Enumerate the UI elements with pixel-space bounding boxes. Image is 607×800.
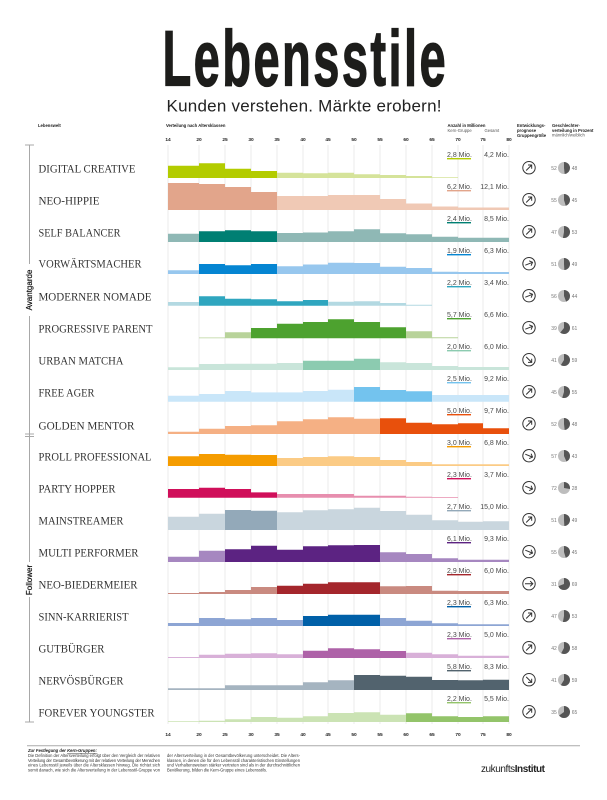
millions: 8,5 Mio.: [484, 216, 509, 223]
trend icon: [520, 351, 538, 368]
gender split: [551, 610, 577, 622]
age distribution: [168, 263, 509, 274]
footnote: eines Lebensstil jeweils über die Altersklassen hinweg. Die richtet sich: [28, 763, 161, 768]
gender split: [551, 546, 577, 558]
name: NERVÖSBÜRGER: [38, 675, 124, 687]
column headers: männlich/weiblich: [552, 132, 585, 138]
millions: [447, 408, 509, 415]
gender split: 55: [551, 198, 557, 204]
millions: [447, 216, 509, 223]
millions: 2,3 Mio.: [447, 600, 472, 607]
bottom age axis: 25: [222, 732, 228, 738]
bottom age axis: 70: [455, 732, 461, 738]
top age axis: 30: [248, 137, 254, 143]
column headers: prognose: [517, 128, 537, 133]
gender split: [551, 642, 577, 654]
row: Mainstreamer: [38, 504, 577, 530]
age distribution: [168, 712, 509, 722]
trend icon: [521, 256, 537, 272]
millions: 3,0 Mio.: [447, 440, 472, 447]
gender split: 28: [572, 486, 577, 492]
age distribution: [199, 319, 458, 338]
millions: 5,0 Mio.: [484, 632, 509, 639]
column headers: Lebenswelt: [38, 123, 61, 128]
column headers: [38, 123, 594, 138]
millions: 6,0 Mio.: [484, 344, 509, 351]
millions: [447, 664, 509, 671]
millions: 6,8 Mio.: [484, 440, 509, 447]
age distribution: [168, 296, 432, 306]
top age axis: 14: [165, 137, 171, 143]
millions: 8,3 Mio.: [484, 664, 509, 671]
millions: 6,3 Mio.: [484, 600, 509, 607]
gender split: 69: [572, 582, 577, 588]
millions: 4,2 Mio.: [484, 152, 509, 159]
trend icon: [521, 544, 537, 560]
gender split: 47: [551, 230, 557, 236]
millions: [447, 696, 509, 703]
footnote: Bevölkerung, bilden die Kern-Gruppe eines Lebensstils.: [167, 768, 267, 772]
gender split: [551, 226, 577, 238]
millions: 6,6 Mio.: [484, 312, 509, 319]
bottom age axis: 14: [165, 732, 171, 738]
row: Progressive Parent: [38, 312, 577, 338]
gender split: [551, 290, 577, 302]
millions: 6,2 Mio.: [447, 184, 472, 191]
age distribution: [168, 675, 509, 690]
bottom age axis: [165, 732, 512, 738]
gender split: 49: [572, 262, 577, 268]
gender split: [551, 194, 577, 206]
row: Vorwärtsmacher: [38, 248, 577, 274]
millions: [447, 504, 509, 511]
millions: 2,5 Mio.: [447, 376, 472, 383]
millions: [447, 152, 509, 159]
bottom age axis: 45: [325, 732, 331, 738]
logo: zukunftsInstitut: zukunftsInstitut: [481, 764, 546, 775]
row: Forever Youngster: [38, 696, 577, 722]
name: FOREVER YOUNGSTER: [38, 707, 155, 719]
top age axis: 35: [274, 137, 280, 143]
gender split: 51: [551, 262, 557, 268]
gender split: 45: [551, 390, 557, 396]
gender split: [551, 258, 577, 270]
name: GOLDEN MENTOR: [38, 420, 135, 432]
gender split: [551, 578, 577, 590]
age distribution: [168, 545, 509, 562]
millions: 15,0 Mio.: [480, 504, 509, 511]
row: Nervösbürger: [38, 664, 577, 690]
row: Multi Performer: [38, 536, 577, 562]
trend icon: [521, 480, 537, 496]
footnote: und Verhaltensweisen stärker vertreten sind als in der durchschnittlichen: [167, 763, 301, 768]
age distribution: [168, 387, 509, 402]
gender split: 35: [551, 710, 557, 716]
top age axis: 55: [377, 137, 383, 143]
gender split: [551, 706, 577, 718]
row: Self Balancer: [38, 216, 577, 242]
millions: 2,2 Mio.: [447, 280, 472, 287]
name: URBAN MATCHA: [38, 355, 124, 367]
row: Gutbürger: [38, 632, 577, 658]
gender split: 59: [572, 358, 577, 364]
footnote: Verteilung der Gesamtbevölkerung mit der relativen Verteilung der Menschen: [28, 758, 161, 763]
millions: 12,1 Mio.: [480, 184, 509, 191]
bottom age axis: 80: [506, 732, 512, 738]
row: Urban Matcha: [38, 344, 577, 370]
bottom age axis: 50: [351, 732, 357, 738]
gender split: 58: [572, 646, 577, 652]
name: MAINSTREAMER: [38, 515, 124, 527]
row: Moderner Nomade: [38, 280, 577, 306]
millions: 5,7 Mio.: [447, 312, 472, 319]
footnote: [27, 748, 301, 772]
label: Follower: Follower: [25, 565, 34, 595]
millions: [447, 632, 509, 639]
top age axis: [165, 137, 512, 143]
column headers: Gruppengröße: [517, 133, 547, 138]
trend icon: [520, 383, 538, 400]
gender split: [551, 418, 577, 430]
top age axis: 50: [351, 137, 357, 143]
row: Neo-Hippie: [38, 183, 577, 210]
trend icon: [523, 578, 535, 590]
age distribution: [168, 582, 509, 594]
gender split: [551, 514, 577, 526]
gender split: 45: [572, 198, 577, 204]
millions: 5,0 Mio.: [447, 408, 472, 415]
millions: 6,1 Mio.: [447, 536, 472, 543]
label: Avantgarde: Avantgarde: [25, 269, 34, 310]
gender split: 44: [572, 294, 577, 300]
column headers: Anzahl in Millionen: [448, 123, 486, 128]
millions: [447, 472, 509, 479]
trend icon: [520, 191, 538, 208]
gender split: 65: [572, 710, 577, 716]
age distribution: [168, 359, 509, 370]
name: GUTBÜRGER: [38, 643, 105, 655]
top age axis: 65: [429, 137, 435, 143]
gender split: [551, 322, 577, 334]
row: Free Ager: [38, 376, 577, 402]
trend icon: [520, 159, 538, 176]
millions: [447, 536, 509, 543]
gender split: 72: [551, 486, 557, 492]
trend icon: [521, 320, 537, 336]
column headers: Gesamt: [484, 128, 500, 133]
top age axis: 40: [300, 137, 306, 143]
age distribution: [168, 648, 509, 658]
footnote: Die Definition der Altersverteilung erfolgt über den Vergleich der relativen: [28, 753, 161, 758]
row: Digital Creative: [38, 152, 577, 178]
gender split: 49: [572, 518, 577, 524]
bottom age axis: 75: [480, 732, 486, 738]
gender split: 53: [572, 230, 577, 236]
millions: 2,2 Mio.: [447, 696, 472, 703]
trend icon: [521, 448, 537, 464]
gender split: 53: [572, 614, 577, 620]
trend icon: [520, 703, 538, 720]
bottom age axis: 35: [274, 732, 280, 738]
millions: [447, 600, 509, 607]
millions: 2,0 Mio.: [447, 344, 472, 351]
gender split: 51: [551, 518, 557, 524]
trend icon: [520, 671, 538, 688]
millions: 3,7 Mio.: [484, 472, 509, 479]
top age axis: 45: [325, 137, 331, 143]
gender split: 48: [572, 166, 577, 172]
gender split: 47: [551, 614, 557, 620]
top age axis: 60: [403, 137, 409, 143]
age distribution: [168, 163, 458, 178]
millions: 2,3 Mio.: [447, 472, 472, 479]
name: PROLL PROFESSIONAL: [38, 451, 152, 463]
gender split: [551, 450, 577, 462]
row: Proll Professional: [38, 440, 577, 466]
bottom age axis: 40: [300, 732, 306, 738]
row: Neo-Biedermeier: [38, 568, 577, 594]
gender split: 48: [572, 422, 577, 428]
millions: 9,3 Mio.: [484, 536, 509, 543]
column headers: Entwicklungs-: [517, 123, 546, 128]
age distribution: [168, 417, 509, 434]
millions: 5,8 Mio.: [447, 664, 472, 671]
trend icon: [520, 415, 538, 432]
name: PARTY HOPPER: [38, 483, 116, 495]
gender split: 31: [551, 582, 557, 588]
column headers: Geschlechter-: [552, 123, 581, 128]
gender split: [551, 386, 577, 398]
age distribution: [168, 508, 509, 530]
millions: 6,3 Mio.: [484, 248, 509, 255]
millions: 2,7 Mio.: [447, 504, 472, 511]
gender split: 39: [551, 326, 557, 332]
footnote: Zur Festlegung der Kern-Gruppen:: [27, 748, 97, 753]
millions: 6,0 Mio.: [484, 568, 509, 575]
gender split: 43: [572, 454, 577, 460]
column headers: Verteilung nach Altersklassen: [166, 123, 226, 128]
millions: [447, 312, 509, 319]
row: Party Hopper: [38, 472, 577, 498]
name: NEO-BIEDERMEIER: [38, 579, 138, 591]
bottom age axis: 30: [248, 732, 254, 738]
trend icon: [520, 223, 538, 240]
trend icon: [520, 639, 538, 656]
name: DIGITAL CREATIVE: [38, 164, 136, 176]
gender split: 55: [551, 550, 557, 556]
millions: 9,2 Mio.: [484, 376, 509, 383]
gender split: [551, 674, 577, 686]
gender split: 52: [551, 166, 557, 172]
column headers: Kern-Gruppe: [448, 128, 472, 133]
age distribution: [168, 615, 509, 626]
millions: 2,9 Mio.: [447, 568, 472, 575]
name: SINN-KARRIERIST: [38, 611, 129, 623]
age distribution: [168, 183, 509, 210]
millions: [447, 344, 509, 351]
top age axis: 25: [222, 137, 228, 143]
bottom age axis: 65: [429, 732, 435, 738]
millions: 2,4 Mio.: [447, 216, 472, 223]
gender split: 55: [572, 390, 577, 396]
row: Sinn-Karrierist: [38, 600, 577, 626]
row: Golden Mentor: [38, 408, 577, 434]
age distribution: [168, 488, 458, 498]
name: MODERNER NOMADE: [38, 291, 152, 303]
age distribution: [168, 454, 509, 466]
footnote: der Altersverteilung in der Gesamtbevölkerung unterscheidet. Die Alters-: [167, 753, 301, 758]
millions: [447, 440, 509, 447]
millions: [447, 568, 509, 575]
trend icon: [520, 511, 538, 528]
name: FREE AGER: [38, 387, 95, 399]
gender split: [551, 354, 577, 366]
top age axis: 20: [196, 137, 202, 143]
trend icon: [520, 607, 538, 624]
gender split: [551, 482, 577, 494]
column headers: verteilung in Prozent: [552, 128, 594, 133]
bottom age axis: 60: [403, 732, 409, 738]
gender split: 41: [551, 358, 557, 364]
bottom age axis: 55: [377, 732, 383, 738]
millions: 1,9 Mio.: [447, 248, 472, 255]
name: MULTI PERFORMER: [38, 547, 139, 559]
top age axis: 70: [455, 137, 461, 143]
millions: [447, 376, 509, 383]
trend icon: [521, 288, 537, 304]
millions: 2,8 Mio.: [447, 152, 472, 159]
title: Lebensstile: [162, 14, 446, 102]
segment bracket: Avantgarde and Follower: [25, 145, 34, 722]
age distribution: [168, 229, 509, 242]
millions: 9,7 Mio.: [484, 408, 509, 415]
millions: [447, 280, 509, 287]
name: NEO-HIPPIE: [38, 195, 100, 207]
gender split: 57: [551, 454, 557, 460]
millions: 3,4 Mio.: [484, 280, 509, 287]
bottom age axis: 20: [196, 732, 202, 738]
name: SELF BALANCER: [38, 227, 121, 239]
gender split: 61: [572, 326, 577, 332]
name: PROGRESSIVE PARENT: [38, 323, 153, 335]
footnote: klassen, in denen die für den Lebensstil charakteristischen Einstellungen: [167, 758, 301, 763]
gender split: 52: [551, 422, 557, 428]
millions: 5,5 Mio.: [484, 696, 509, 703]
gender split: 41: [551, 678, 557, 684]
gender split: [551, 162, 577, 174]
gender split: 56: [551, 294, 557, 300]
top age axis: 80: [506, 137, 512, 143]
footnote: somit danach, wie sich die Altersverteilung in der Lebensstil-Gruppe von: [28, 768, 161, 772]
gender split: 45: [572, 550, 577, 556]
gender split: 42: [551, 646, 557, 652]
subtitle: Kunden verstehen. Märkte erobern!: [166, 97, 442, 116]
gender split: 59: [572, 678, 577, 684]
millions: [447, 184, 509, 191]
top age axis: 75: [480, 137, 486, 143]
name: VORWÄRTSMACHER: [38, 259, 142, 271]
millions: [447, 248, 509, 255]
millions: 2,3 Mio.: [447, 632, 472, 639]
